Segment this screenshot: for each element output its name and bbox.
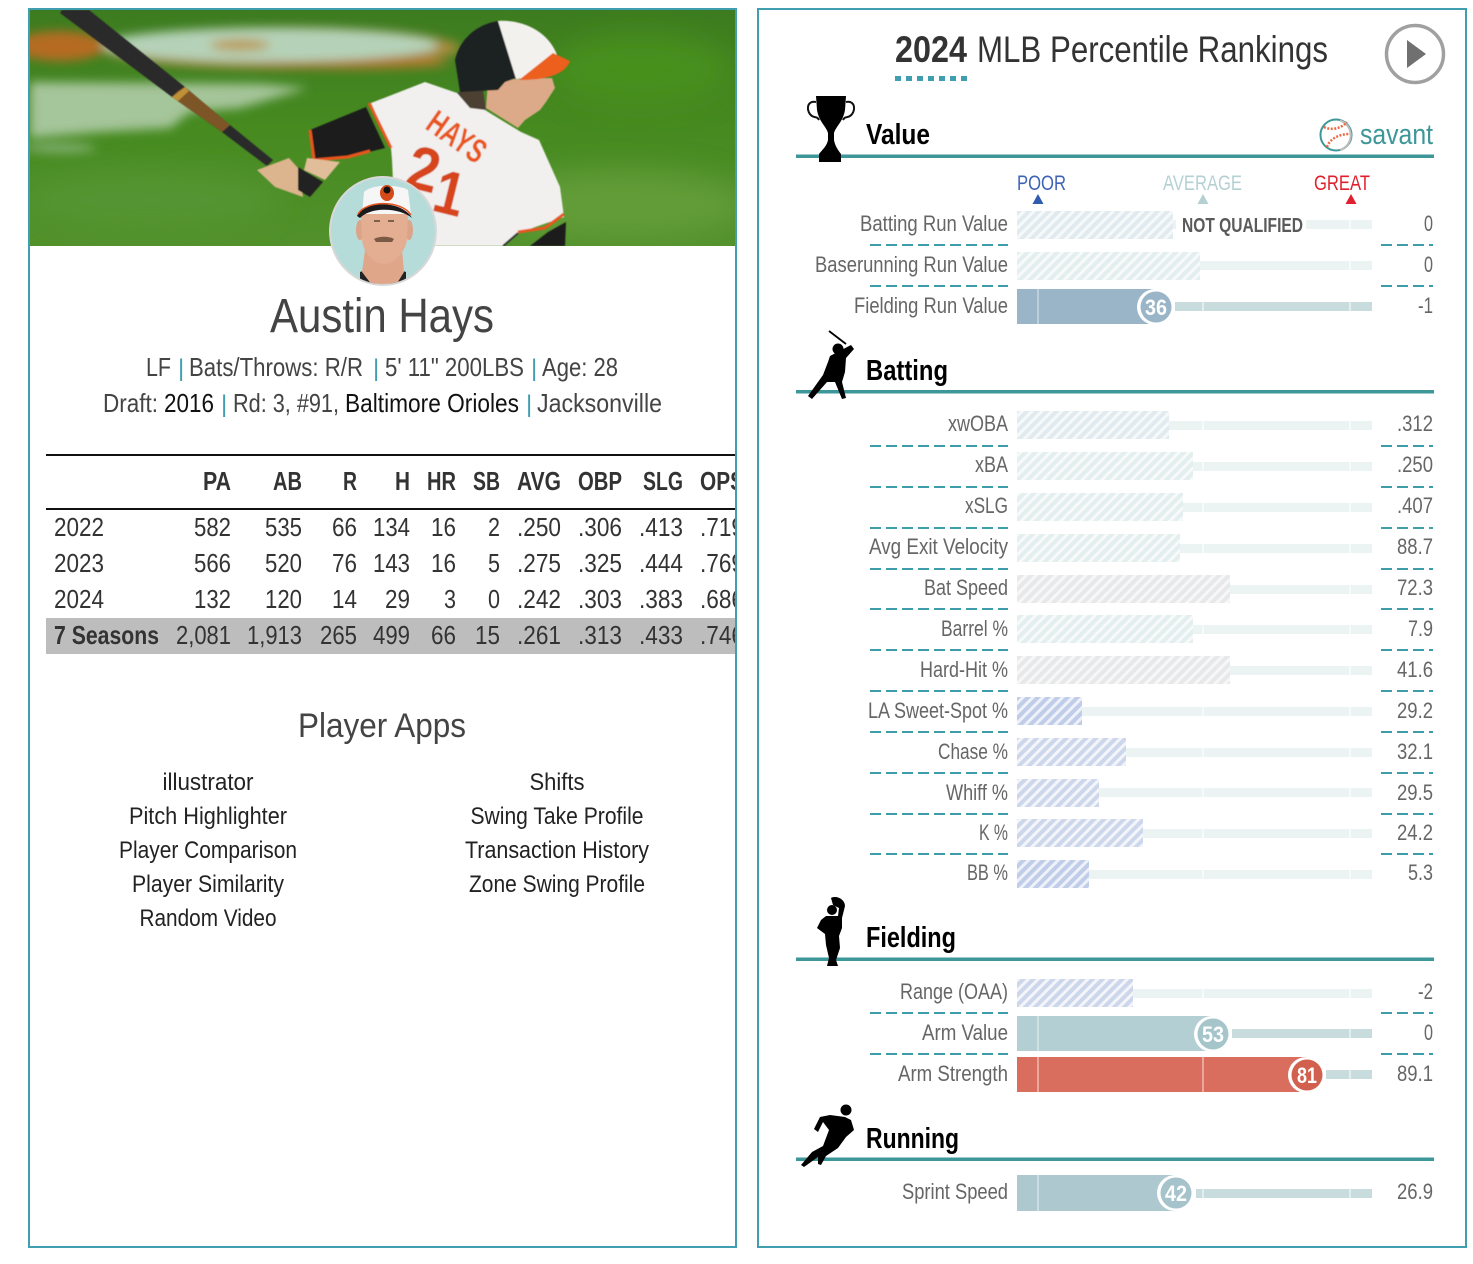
row: batting run value: Batting Run Value [860,211,1008,236]
row: whiff [870,779,1433,814]
player bio line 2: Rd: 3, #91, [233,388,339,418]
row: range: Range (OAA) [900,979,1008,1004]
row: arm strength [898,1057,1433,1093]
player bio line 1: LF [146,352,171,382]
row: LA sweet-spot: LA Sweet-Spot % [868,698,1008,723]
table header: HR [427,466,456,496]
row 2024: .383 [639,584,683,614]
row: BB: BB % [967,860,1008,885]
row 2022: .250 [517,512,561,542]
player bio line 2: | [221,391,227,418]
player apps links: Transaction History [465,837,649,864]
title: 2024 [895,29,967,70]
row: batting run value: NOT QUALIFIED [1182,215,1303,237]
neck and face [486,78,555,128]
row 7 seasons totals: 1,913 [247,620,302,650]
section: running [796,1104,1434,1211]
player bio line 1 [146,352,618,382]
row 2022 [55,518,735,536]
row 7 seasons totals: .433 [639,620,683,650]
row 2024: 132 [194,584,231,614]
player apps links: illustrator [162,769,254,796]
row 7 seasons totals [54,626,735,648]
row 7 seasons totals: .746 [700,620,744,650]
player bio line 2: | [526,391,532,418]
row: K [870,819,1433,854]
player bio line 1: Bats/Throws: R/R [189,352,363,382]
row: baserunning run value [815,252,1433,286]
icon: runner silhouette [801,1104,854,1167]
row 2022: 2 [488,512,500,542]
player bio line 2 [103,388,662,418]
row 2022: .306 [578,512,622,542]
player headshot [330,177,436,285]
row: bat speed: 72.3 [1397,575,1433,600]
hero photo of batter [14,10,750,246]
player bio line 1: | [178,355,184,382]
helmet [455,21,516,92]
row: LA sweet-spot: 29.2 [1397,698,1433,723]
row 7 seasons totals: .313 [578,620,622,650]
row: sprint speed: 42 [1165,1181,1187,1206]
row 2023: 2023 [54,548,104,578]
row: arm value: 53 [1202,1022,1224,1047]
row: fielding run value: 36 [1145,295,1167,320]
row: BB: 5.3 [1408,860,1433,885]
row: sprint speed: 26.9 [1397,1179,1433,1204]
row 2022: 2022 [54,512,104,542]
table header: OPS [700,466,744,496]
row 7 seasons totals: 15 [475,620,500,650]
row 2023 [55,554,735,572]
player apps links: Pitch Highlighter [129,803,287,830]
row 2024: 14 [332,584,357,614]
row: xBA: xBA [975,452,1008,477]
row: batting run value [860,211,1433,245]
table header: R [343,466,357,496]
row: xwOBA: .312 [1397,411,1433,436]
row 2023: 143 [373,548,410,578]
row 2024: 3 [444,584,456,614]
table header: AB [273,466,302,496]
row: K: 24.2 [1397,820,1433,845]
heading: running: Running [866,1123,959,1155]
player apps links: Zone Swing Profile [469,871,645,898]
player bio line 1: Age: 28 [542,352,618,382]
row 2024: .303 [578,584,622,614]
row: chase: Chase % [938,739,1008,764]
row: whiff: 29.5 [1397,780,1433,805]
row 2022: 134 [373,512,410,542]
row: whiff: Whiff % [946,780,1008,805]
section: value [796,96,1434,325]
stats table [46,454,744,654]
row 2023: 16 [431,548,456,578]
icon: batter silhouette [808,331,854,399]
row 2024: 2024 [54,584,104,614]
row 2024: .242 [517,584,561,614]
row: fielding run value: Fielding Run Value [854,293,1008,318]
player bio line 1: | [373,355,379,382]
row 2024: 0 [488,584,500,614]
player apps links: Player Similarity [132,871,284,898]
table header [204,472,735,490]
forearm and hand [304,158,340,180]
hero photo of batter: 1 [427,157,472,231]
player apps links: Shifts [530,769,584,796]
row: baserunning run value: Baserunning Run Value [815,252,1008,277]
row: xSLG: xSLG [965,493,1008,518]
row: baserunning run value: 0 [1424,252,1433,277]
row 2024: 120 [265,584,302,614]
row 2024 [55,590,735,608]
icon: savant baseball [1320,120,1352,150]
row: range: -2 [1418,979,1433,1004]
row 2022: 66 [332,512,357,542]
player bio line 1: | [531,355,537,382]
row: sprint speed [902,1175,1433,1211]
panel: percentile rankings [758,9,1466,1247]
row 2023: 566 [194,548,231,578]
legend: poor average great: GREAT [1314,172,1370,195]
row 7 seasons totals: 265 [320,620,357,650]
section: batting [796,331,1434,888]
icon: fielder silhouette [817,897,845,966]
row: chase [870,738,1433,773]
player apps links: Swing Take Profile [470,803,644,830]
row: range [870,979,1433,1013]
player bio line 2: Draft: [103,388,158,418]
row: barrel [870,615,1433,650]
row: xwOBA [870,411,1433,446]
legend: poor average great [1017,172,1370,204]
row: bat speed: Bat Speed [924,575,1008,600]
row: arm value: Arm Value [922,1020,1008,1045]
icon: trophy [808,96,854,162]
title dotted underline [895,76,968,81]
player apps heading: Player Apps [298,707,466,745]
player apps links: Player Comparison [119,837,297,864]
panel: player card [14,9,750,1247]
row: LA sweet-spot [868,697,1433,732]
player bio line 1: 5' 11" 200LBS [385,352,524,382]
row 7 seasons totals: 2,081 [176,620,231,650]
player apps links [119,769,649,932]
row: K: K % [979,820,1008,845]
row: barrel: 7.9 [1408,616,1433,641]
row 2022: 582 [194,512,231,542]
title: MLB Percentile Rankings [977,29,1328,70]
section: fielding [796,897,1434,1093]
row 7 seasons totals: 499 [373,620,410,650]
heading: batting: Batting [866,355,948,387]
row 2022: 16 [431,512,456,542]
row 2023: .275 [517,548,561,578]
row 7 seasons totals: 66 [431,620,456,650]
row: xBA [870,452,1433,487]
row: batting run value: 0 [1424,211,1433,236]
row: barrel: Barrel % [941,616,1008,641]
table header: AVG [517,466,561,496]
row: xSLG [870,493,1433,528]
row: chase: 32.1 [1397,739,1433,764]
table header: SLG [643,466,683,496]
row: hard-hit [870,656,1433,691]
table header: OBP [578,466,622,496]
savant wordmark: savant [1360,119,1433,151]
row: BB [967,860,1433,888]
player bio line 2: Jacksonville [537,388,662,418]
legend: poor average great: AVERAGE [1163,172,1242,195]
row: arm strength: 89.1 [1397,1061,1433,1086]
row: fielding run value: -1 [1418,293,1433,318]
row 2023: .325 [578,548,622,578]
row: xBA: .250 [1397,452,1433,477]
heading: fielding: Fielding [866,922,956,954]
row 2023: 520 [265,548,302,578]
player name: Austin Hays [270,290,494,343]
row: avg exit velocity [869,534,1433,569]
row 2024: 29 [385,584,410,614]
row 2023: 5 [488,548,500,578]
table header: SB [473,466,500,496]
row: sprint speed: Sprint Speed [902,1179,1008,1204]
row: fielding run value [854,289,1433,325]
row: arm strength: 81 [1297,1063,1317,1088]
row 7 seasons totals: 7 Seasons [54,620,159,650]
hero photo of batter: 2 [400,133,447,207]
row 2023: .444 [639,548,683,578]
table header: H [395,466,410,496]
jersey name and number: HAYS [419,103,494,171]
row 2023: 76 [332,548,357,578]
row: avg exit velocity: 88.7 [1397,534,1433,559]
row 2022: .719 [700,512,744,542]
player apps links: Random Video [140,905,276,932]
row: xSLG: .407 [1397,493,1433,518]
row: hard-hit: Hard-Hit % [920,657,1008,682]
row: arm strength: Arm Strength [898,1061,1008,1086]
row: avg exit velocity: Avg Exit Velocity [869,534,1008,559]
icon: play button [1386,26,1444,82]
legend: poor average great: POOR [1017,172,1066,195]
row: bat speed [870,575,1433,609]
row 7 seasons totals: .261 [517,620,561,650]
row: hard-hit: 41.6 [1397,657,1433,682]
row 2024: .686 [700,584,744,614]
arm sleeve [310,107,385,160]
player bio line 2: Baltimore Orioles [345,388,519,418]
table header: PA [203,466,231,496]
row: arm value [870,1016,1433,1054]
row: xwOBA: xwOBA [948,411,1008,436]
heading: value: Value [866,119,930,151]
row 2022: .413 [639,512,683,542]
jersey [371,82,564,246]
row: arm value: 0 [1424,1020,1433,1045]
bat [60,10,273,166]
row 2022: 535 [265,512,302,542]
row 2023: .769 [700,548,744,578]
player bio line 2: 2016 [164,388,214,418]
